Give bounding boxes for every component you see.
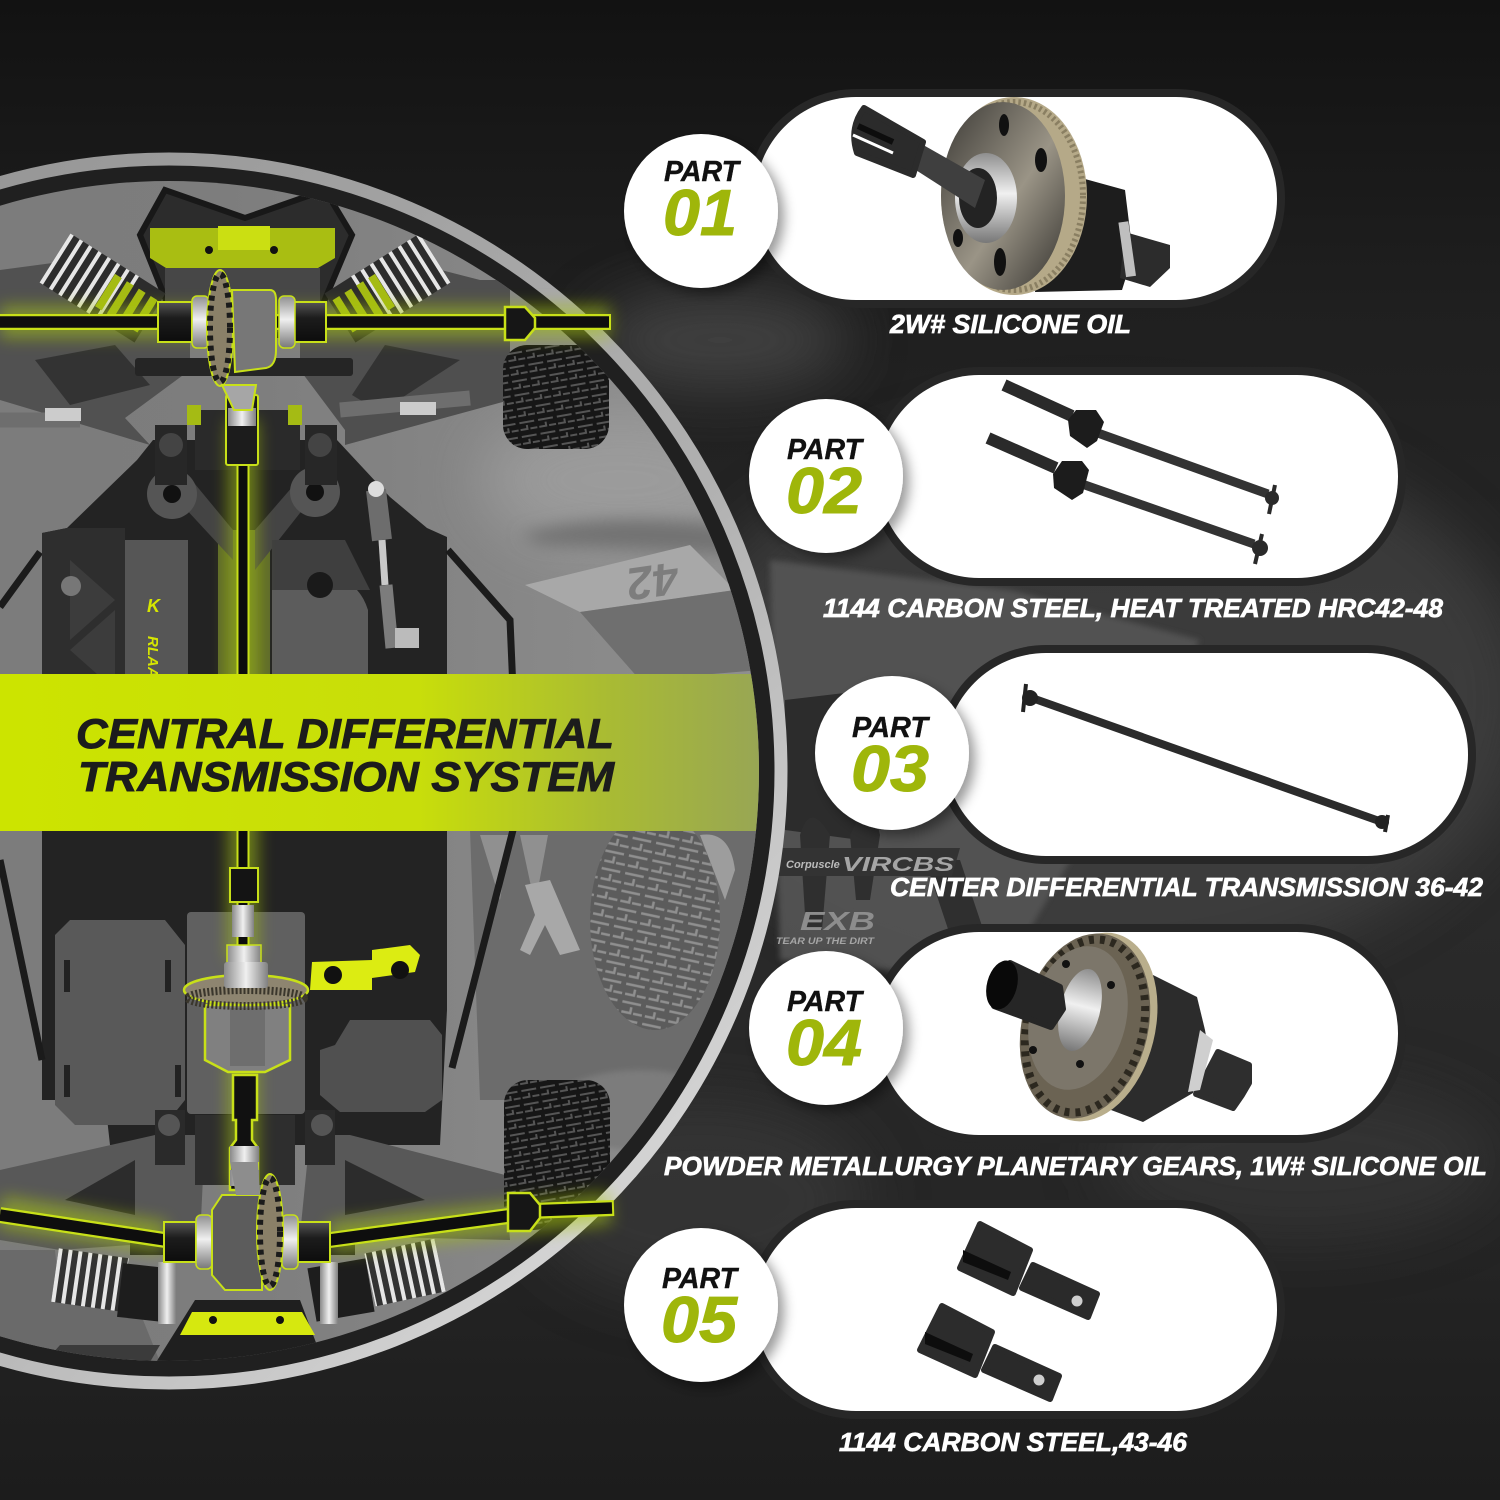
car sponsor logos: TEAR UP THE DIRT	[776, 936, 876, 946]
part 05 product image	[920, 1224, 1097, 1399]
highlighted drivetrain: centre differential	[184, 962, 308, 1072]
part 05 badge	[624, 1228, 778, 1382]
part 04 badge: 04	[786, 1006, 862, 1079]
part 02 badge: 02	[786, 454, 862, 527]
banner heading: TRANSMISSION SYSTEM	[78, 753, 615, 800]
panel: part 05	[624, 1200, 1285, 1457]
part 05 badge: PART	[662, 1263, 739, 1295]
front suspension arms	[0, 262, 190, 445]
tires	[503, 345, 609, 449]
banner	[0, 674, 795, 831]
tie rods	[0, 398, 470, 420]
part 01 badge: PART	[664, 156, 741, 188]
banner heading	[76, 710, 615, 800]
car sponsor logos	[776, 854, 955, 946]
part 03 product image	[1022, 684, 1389, 832]
part 05 badge: 05	[661, 1283, 738, 1356]
logo text: RLAAR	[144, 636, 161, 689]
highlighted drivetrain: rear axle	[0, 1162, 614, 1290]
part 04 badge: PART	[787, 986, 864, 1018]
banner heading: CENTRAL DIFFERENTIAL	[76, 710, 614, 757]
smoke and car seen through the panel	[470, 410, 760, 1150]
part 02 badge	[749, 399, 903, 553]
highlighted drivetrain: centre shaft	[226, 395, 265, 1190]
part 04 product image	[981, 919, 1249, 1135]
rear bumper and lime mount	[157, 1300, 316, 1361]
background car silhouette	[770, 520, 1200, 980]
panel: part 03	[815, 645, 1484, 902]
car sponsor logos: Corpuscle	[786, 859, 840, 871]
part 05 caption: 1144 CARBON STEEL,43-46	[839, 1427, 1188, 1457]
rear springs	[55, 1265, 440, 1295]
part 02 badge: PART	[787, 434, 864, 466]
part 02 product image	[988, 385, 1279, 564]
part 04 badge	[749, 951, 903, 1105]
part 01 badge	[624, 134, 778, 288]
part 03 caption: CENTER DIFFERENTIAL TRANSMISSION 36-42	[890, 872, 1484, 902]
chassis tub	[42, 440, 447, 1145]
panel: part 01	[624, 89, 1285, 339]
part 03 badge: PART	[852, 712, 930, 744]
part 03 badge	[815, 676, 969, 830]
logo text: K	[147, 596, 162, 616]
part 01 badge: 01	[663, 176, 737, 249]
part 01 product image	[853, 97, 1170, 295]
part 04 caption: POWDER METALLURGY PLANETARY GEARS, 1W# SILICONE OIL	[664, 1151, 1487, 1181]
panel: part 04	[664, 919, 1487, 1181]
logo text	[147, 599, 161, 674]
highlighted drivetrain: front axle	[0, 270, 611, 410]
car sponsor logos: VIRCBS	[842, 854, 955, 876]
part 01 caption: 2W# SILICONE OIL	[889, 309, 1131, 339]
rear arms	[0, 1135, 205, 1250]
circular chassis panel	[0, 159, 781, 1383]
car sponsor logos: EXB	[800, 906, 875, 936]
part 03 badge: 03	[851, 732, 929, 805]
steering link	[368, 481, 419, 648]
front springs	[55, 258, 435, 318]
lower covers	[55, 920, 185, 1125]
part 02 caption: 1144 CARBON STEEL, HEAT TREATED HRC42-48	[823, 593, 1444, 623]
front bumper and lime mount	[140, 190, 352, 335]
smoke and car seen through the panel: 42	[624, 552, 683, 611]
panel: part 02	[749, 367, 1444, 623]
